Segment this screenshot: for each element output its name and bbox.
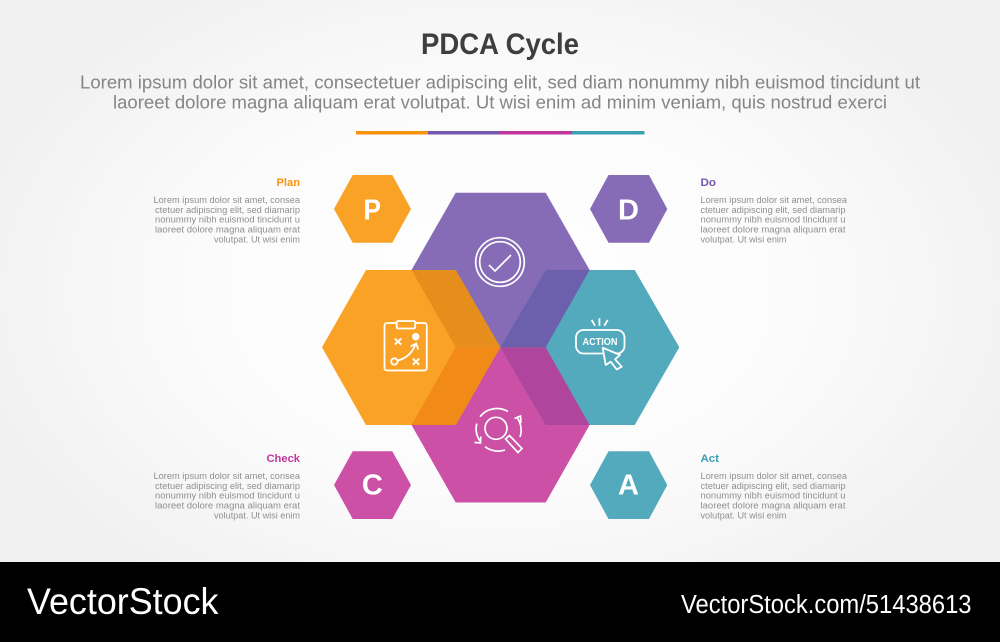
text block: plan	[154, 177, 301, 246]
icon: strategy clipboard	[384, 321, 427, 370]
text block: do: laoreet dolore magna aliquam erat	[700, 224, 846, 236]
text block: plan: Lorem ipsum dolor sit amet, consea	[154, 195, 301, 206]
overlap: plan and do	[412, 270, 500, 347]
text block: plan: laoreet dolore magna aliquam erat	[155, 224, 300, 236]
icon: check mark in circle	[476, 238, 524, 286]
watermark bar	[0, 562, 1000, 642]
text block: act: volutpat. Ut wisi enim	[700, 510, 787, 522]
text block: plan: volutpat. Ut wisi enim	[214, 234, 300, 246]
title underline bar	[356, 131, 644, 134]
text block: do: nonummy nibh euismod tincidunt u	[700, 215, 846, 226]
small hexagon: P	[334, 175, 411, 243]
text block: check	[154, 453, 301, 522]
text block: do: ctetuer adipiscing elit, sed diamarip	[700, 205, 846, 216]
small hexagon: A: A	[618, 470, 639, 502]
small hexagon: C	[334, 451, 411, 519]
subtitle: Lorem ipsum dolor sit amet, consectetuer adipiscing elit, sed diam nonummy nibh euismod tincidunt ut	[80, 72, 920, 92]
text block: act: ctetuer adipiscing elit, sed diamarip	[700, 481, 846, 492]
text block: do: Do	[700, 177, 716, 189]
small hexagon: C: C	[362, 470, 383, 502]
text block: plan: nonummy nibh euismod tincidunt u	[155, 215, 300, 226]
text block: plan: ctetuer adipiscing elit, sed diamarip	[155, 205, 300, 216]
text block: check: laoreet dolore magna aliquam erat	[155, 500, 300, 512]
text block: act: Lorem ipsum dolor sit amet, consea	[700, 471, 848, 482]
hexagon: act	[500, 270, 679, 425]
text block: check: Lorem ipsum dolor sit amet, consea	[154, 471, 301, 482]
hexagon: check	[412, 347, 590, 502]
overlap: plan and check	[412, 347, 500, 425]
small hexagon: D: D	[618, 194, 639, 226]
small hexagon: A	[590, 451, 667, 519]
hexagon: plan	[322, 270, 500, 425]
watermark bar: VectorStock	[27, 581, 219, 622]
text block: act: nonummy nibh euismod tincidunt u	[700, 491, 846, 502]
overlap: check and act	[500, 347, 590, 425]
text block: check: Check	[266, 453, 301, 465]
hexagon: do	[412, 193, 590, 347]
subtitle	[80, 72, 920, 112]
icon: action button	[576, 318, 624, 370]
central hexagon cluster	[322, 193, 679, 502]
text block: check: volutpat. Ut wisi enim	[214, 510, 300, 522]
text block: do: Lorem ipsum dolor sit amet, consea	[700, 195, 848, 206]
text block: act	[700, 453, 848, 522]
text block: check: nonummy nibh euismod tincidunt u	[155, 491, 300, 502]
small hexagon: P: P	[364, 194, 381, 226]
icon: action button: ACTION	[582, 337, 618, 348]
overlap: do and act	[500, 270, 590, 347]
title: PDCA Cycle	[421, 28, 579, 61]
text block: do	[700, 177, 848, 246]
text block: act: laoreet dolore magna aliquam erat	[700, 500, 846, 512]
text block: act: Act	[700, 453, 719, 465]
text block: plan: Plan	[276, 177, 300, 189]
subtitle: laoreet dolore magna aliquam erat volutpat. Ut wisi enim ad minim veniam, quis nostrud exerci	[113, 92, 887, 112]
watermark bar: VectorStock.com/51438613	[681, 591, 972, 619]
text block: do: volutpat. Ut wisi enim	[700, 234, 787, 246]
text block: check: ctetuer adipiscing elit, sed diamarip	[155, 481, 300, 492]
icon: magnifier with cycle arrows	[474, 408, 522, 452]
small hexagon: D	[590, 175, 667, 243]
